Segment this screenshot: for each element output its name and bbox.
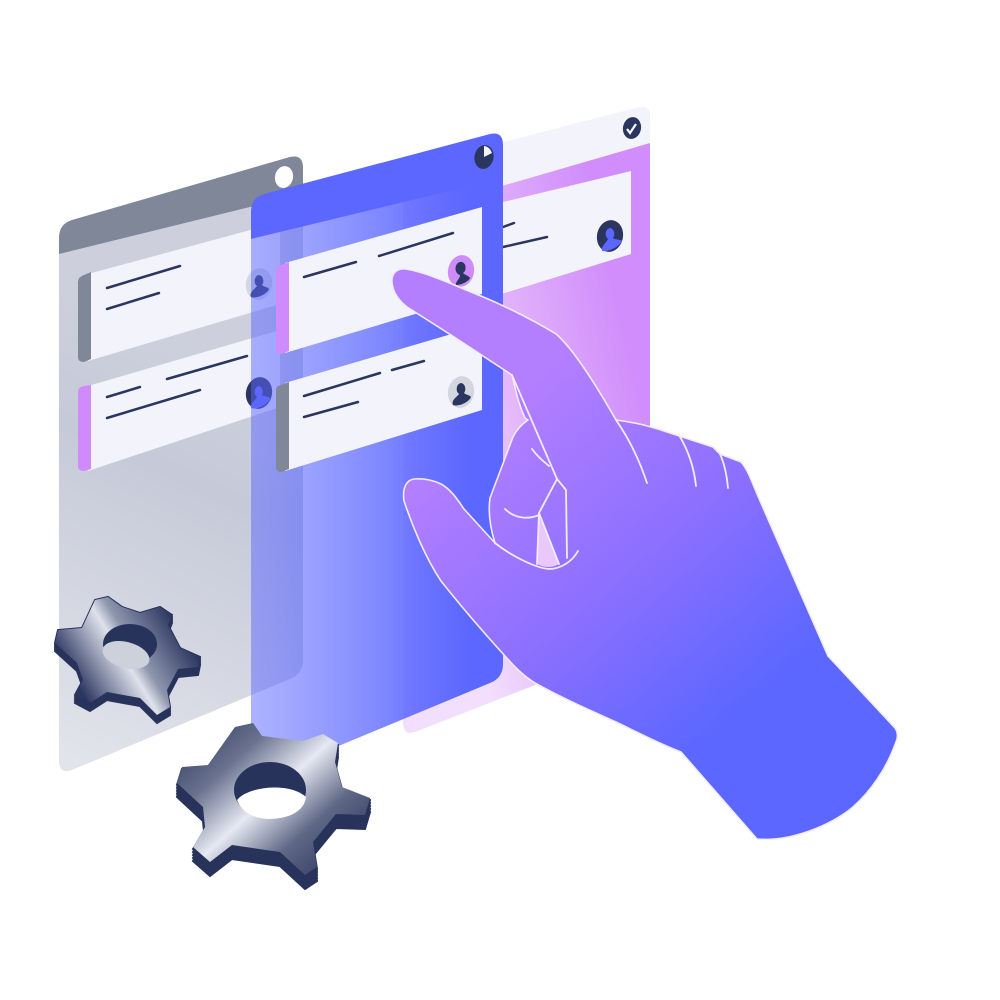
card: gray task — [78, 222, 280, 362]
card: purple task — [78, 330, 280, 471]
card: gray task — [276, 325, 482, 472]
panel: blue task board — [251, 133, 503, 778]
icon: large gear — [177, 723, 370, 889]
card: pink panel task — [495, 171, 631, 296]
hand pointing at card — [392, 269, 897, 839]
hand silhouette — [392, 269, 897, 839]
gray panel header — [59, 156, 303, 254]
icon: check mark badge — [621, 115, 643, 141]
icon: white status circle — [273, 164, 295, 190]
gap between fingers — [537, 515, 559, 567]
panel: pink task board — [403, 107, 650, 733]
card: active purple task — [276, 207, 482, 354]
pink panel body — [403, 108, 650, 733]
blue panel body — [251, 176, 503, 778]
gray panel body — [59, 156, 303, 771]
panel: gray task board — [59, 156, 303, 771]
finger crease lines — [495, 375, 728, 569]
icon: small gear — [55, 597, 200, 723]
icon: pie progress badge — [472, 143, 496, 171]
pink panel header — [495, 107, 650, 188]
blue panel header — [251, 133, 503, 239]
